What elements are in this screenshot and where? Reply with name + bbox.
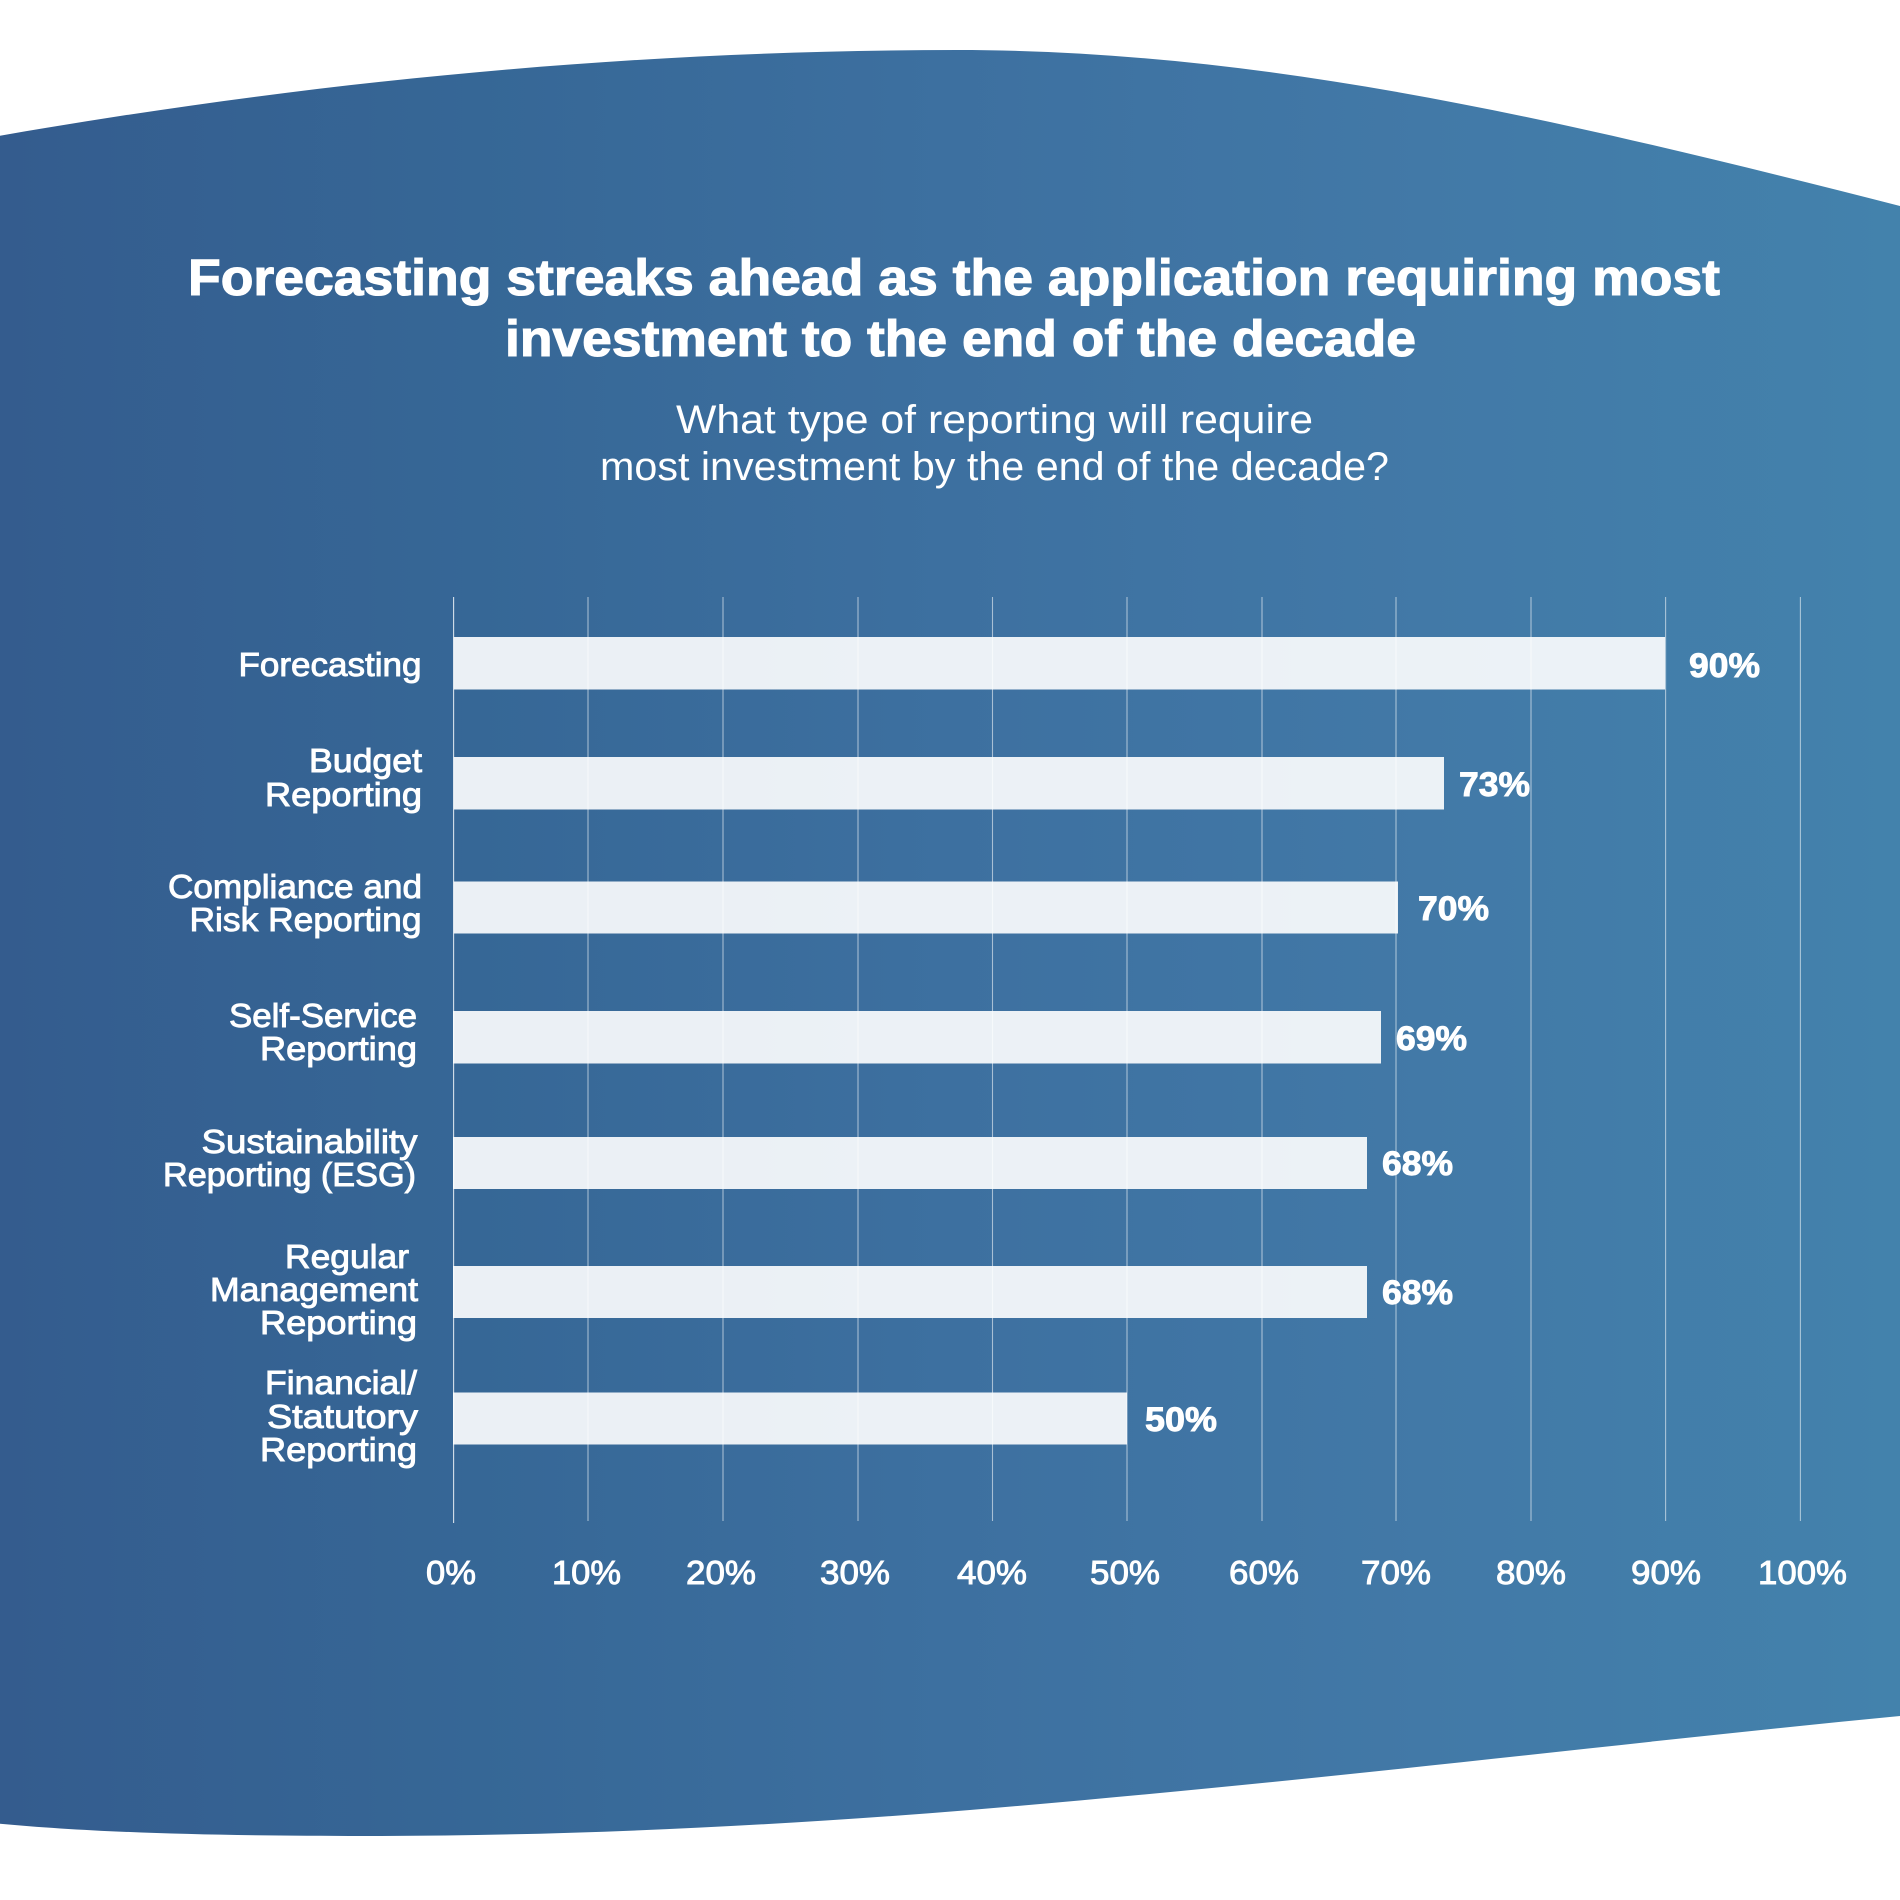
category label: Sustainability Reporting (ESG): Sustainability <box>202 1123 418 1160</box>
category label: Regular Management Reporting: Reporting <box>260 1304 417 1341</box>
subtitle: most investment by the end of the decade? <box>600 445 1389 489</box>
category label: Financial/Statutory Reporting <box>260 1364 419 1468</box>
category label: Sustainability Reporting (ESG): Reporting (ESG) <box>163 1156 416 1193</box>
category label: Budget Reporting <box>265 742 422 813</box>
title: investment to the end of the decade <box>505 310 1416 367</box>
bar: Regular Management Reporting 68% <box>453 1266 1367 1318</box>
category label: Compliance and Risk Reporting: Compliance and <box>168 868 422 905</box>
title <box>188 249 1720 367</box>
bar: Budget Reporting 73% <box>454 757 1444 810</box>
category label: Financial/Statutory Reporting: Financial/ <box>265 1364 418 1401</box>
subtitle <box>600 398 1389 489</box>
category label: Compliance and Risk Reporting <box>168 868 422 938</box>
x axis labels: 30% <box>820 1554 890 1591</box>
x axis labels: 40% <box>957 1554 1027 1591</box>
x axis labels: 50% <box>1090 1554 1160 1591</box>
category label: Compliance and Risk Reporting: Risk Reporting <box>190 901 422 938</box>
category label: Self-Service Reporting: Reporting <box>260 1030 417 1067</box>
value label: 69%: 69% <box>1396 1020 1467 1058</box>
value label: 90%: 90% <box>1689 647 1760 685</box>
value label: 68% sustainability: 68% <box>1382 1145 1453 1183</box>
bar: Financial/Statutory Reporting 50% <box>453 1392 1127 1444</box>
category label: Financial/Statutory Reporting: Statutory <box>267 1398 419 1435</box>
bar: Forecasting 90% <box>454 637 1665 690</box>
category label: Budget Reporting: Reporting <box>265 776 422 813</box>
category label: Budget Reporting: Budget <box>309 742 422 779</box>
x axis labels: 90% <box>1631 1554 1701 1591</box>
category label: Sustainability Reporting (ESG) <box>163 1123 418 1193</box>
x axis labels: 70% <box>1361 1554 1431 1591</box>
category label: Self-Service Reporting <box>229 997 417 1067</box>
category label: Self-Service Reporting: Self-Service <box>229 997 417 1034</box>
value label: 70%: 70% <box>1418 890 1489 928</box>
value label: 73%: 73% <box>1459 766 1530 804</box>
x axis labels: 100% <box>1758 1554 1847 1591</box>
x axis labels: 60% <box>1229 1554 1299 1591</box>
category label: Forecasting: Forecasting <box>238 646 422 683</box>
title: Forecasting streaks ahead as the application requiring most <box>188 249 1720 306</box>
category label: Regular Management Reporting <box>210 1238 418 1341</box>
subtitle: What type of reporting will require <box>676 398 1313 442</box>
bar chart <box>453 597 1800 1523</box>
category label: Financial/Statutory Reporting: Reporting <box>260 1431 417 1468</box>
x axis labels: 20% <box>686 1554 756 1591</box>
category label: Regular Management Reporting: Management <box>210 1271 418 1308</box>
value label: 68% regular management: 68% <box>1382 1274 1453 1312</box>
bar: Compliance and Risk Reporting 70% <box>454 882 1398 934</box>
x axis labels <box>426 1554 1847 1591</box>
x axis labels: 0% <box>426 1554 476 1591</box>
x axis labels: 80% <box>1496 1554 1566 1591</box>
value label: 50%: 50% <box>1145 1401 1217 1439</box>
bar: Self-Service Reporting 69% <box>453 1011 1381 1064</box>
bar: Sustainability Reporting 68% <box>453 1137 1367 1189</box>
x axis labels: 10% <box>552 1554 621 1591</box>
category label: Regular Management Reporting: Regular <box>285 1238 409 1275</box>
